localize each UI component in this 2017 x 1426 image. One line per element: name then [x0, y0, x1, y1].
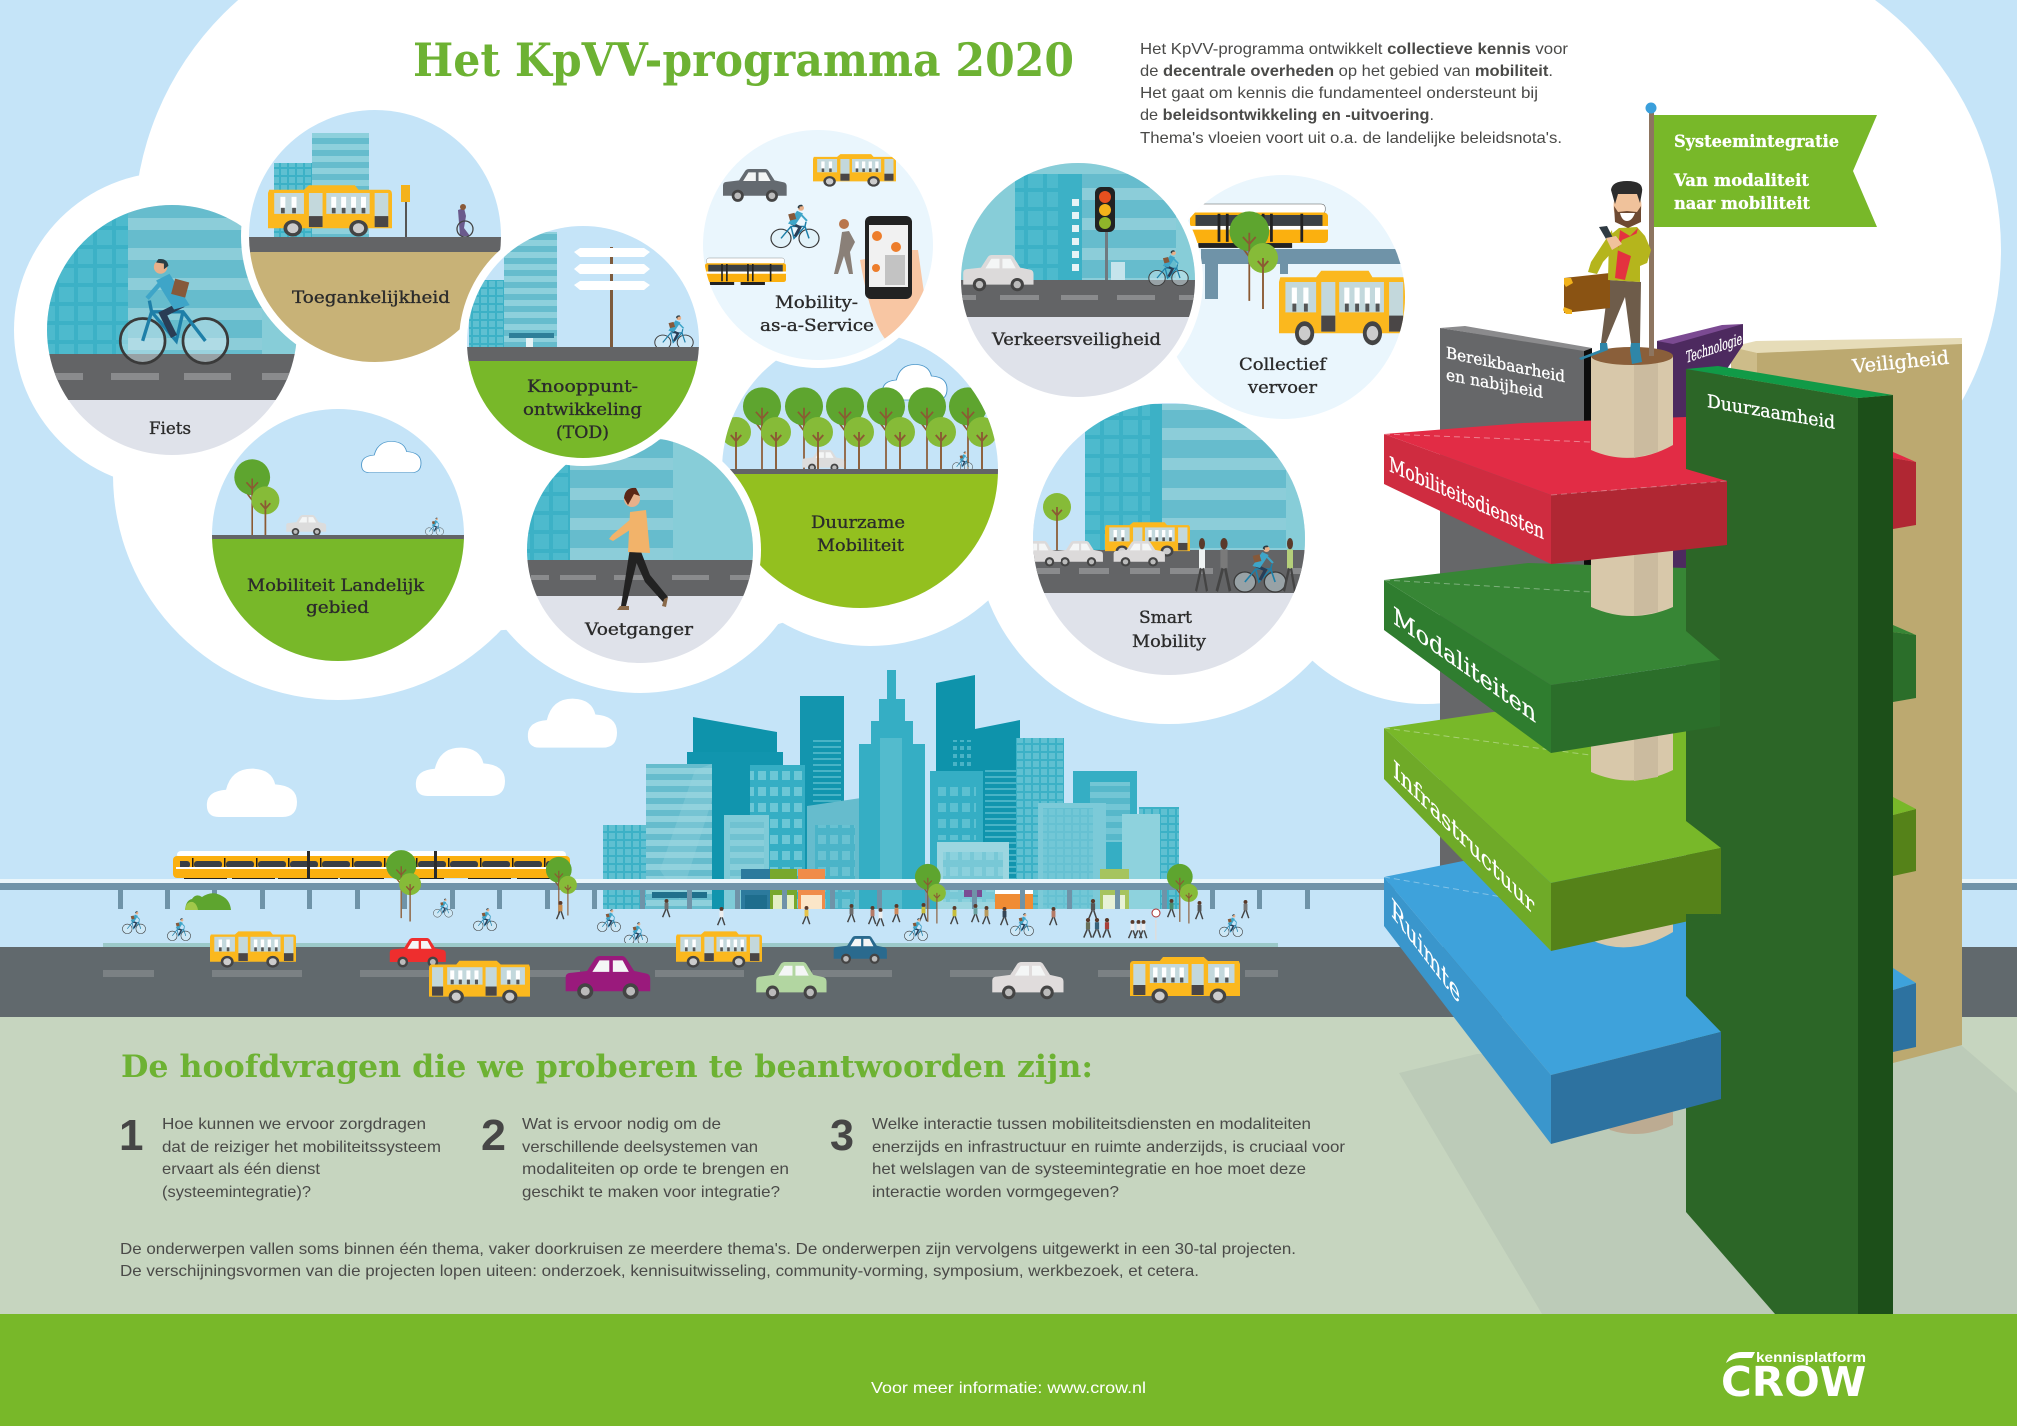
theme circle: Collectief vervoer: Collectief: [1239, 355, 1328, 375]
vehicles on road: [210, 931, 1240, 1004]
shelf: Ruimte: Ruimte: [1391, 892, 1460, 1012]
closing note: [120, 1241, 1296, 1280]
theme circle: Fiets: Fiets: [149, 419, 191, 439]
theme circle: Knooppuntontwikkeling (TOD): Knooppunt-: [527, 377, 638, 397]
panel: Technologie: Technologie: [1686, 329, 1742, 367]
cylinder segment: [1591, 545, 1673, 616]
theme circle: Mobility-as-a-Service: as-a-Service: [760, 316, 874, 336]
question 2: verschillende deelsystemen van: [522, 1139, 758, 1156]
theme circle: Collectief vervoer: [1176, 175, 1405, 419]
shelf: Infrastructuur: Infrastructuur: [1393, 754, 1534, 921]
flag with pole: Van modaliteit: [1673, 171, 1809, 191]
flag with pole: [1646, 102, 1877, 356]
question 1: Hoe kunnen we ervoor zorgdragen: [162, 1116, 426, 1133]
theme circle: Smart Mobility: Smart: [1139, 608, 1192, 628]
theme circle: Voetganger: [527, 438, 761, 663]
footer text: Voor meer informatie: www.crow.nl: [871, 1380, 1146, 1397]
heading: main questions: De hoofdvragen die we proberen te beantwoorden zijn:: [121, 1049, 1093, 1085]
theme circle: Fiets: [47, 205, 296, 455]
clouds above the city: [207, 699, 617, 817]
cylinder bottom segment: [1601, 1112, 1673, 1134]
theme circle: Mobility-as-a-Service: [695, 122, 941, 368]
roadside trees: [386, 850, 1198, 924]
theme circle: Collectief vervoer: vervoer: [1247, 378, 1318, 398]
shelf: Modaliteiten: Modaliteiten: [1393, 601, 1536, 729]
question 3: 3: [830, 1111, 854, 1160]
flag with pole: naar mobiliteit: [1674, 194, 1810, 214]
theme circle: Mobility-as-a-Service: Mobility-: [775, 293, 858, 313]
CROW logo: CROW: [1721, 1358, 1866, 1406]
intro text: Het gaat om kennis die fundamenteel ondersteunt bij: [1140, 85, 1538, 102]
theme circle: Mobiliteit Landelijk gebied: [212, 409, 464, 661]
question 3: [830, 1111, 1346, 1201]
panel: Bereikbaarheid en nabijheid: Bereikbaarheid: [1446, 343, 1565, 386]
ground: [0, 1017, 2017, 1314]
white cloud backdrop: [14, 0, 2001, 724]
panel: Duurzaamheid: [1686, 366, 1893, 1314]
question 2: geschikt te maken voor integratie?: [522, 1184, 780, 1201]
intro text: Thema's vloeien voort uit o.a. de landelijke beleidsnota's.: [1140, 130, 1562, 147]
theme circle: Mobiliteit Landelijk gebied: gebied: [306, 598, 369, 618]
pedestrians on pavement: [557, 899, 1249, 940]
theme circle: Verkeersveiligheid: [953, 155, 1203, 405]
question 3: het welslagen van de systeemintegratie en hoe moet deze: [872, 1161, 1306, 1178]
city skyline: [603, 670, 1179, 909]
cyclists on pavement: [122, 899, 1243, 945]
theme circle: Duurzame Mobiliteit: Mobiliteit: [817, 536, 904, 556]
intro text: Het KpVV-programma ontwikkelt collectieve kennis voor: [1140, 41, 1569, 58]
panel: Bereikbaarheid en nabijheid: en nabijheid: [1446, 365, 1543, 402]
theme circle: Verkeersveiligheid: Verkeersveiligheid: [991, 330, 1161, 350]
panel: Technologie: [1657, 324, 1743, 568]
cylinder segment: [1591, 915, 1673, 947]
theme circle: Knooppuntontwikkeling (TOD): ontwikkeling: [523, 400, 642, 420]
CROW logo: kennisplatform: [1756, 1349, 1866, 1365]
title: Het KpVV-programma 2020: [413, 33, 1074, 87]
question 1: dat de reiziger het mobiliteitssysteem: [162, 1139, 441, 1156]
theme circle: Smart Mobility: Mobility: [1132, 632, 1206, 652]
shelf: Infrastructuur: [1384, 700, 1721, 951]
question 3: enerzijds en infrastructuur en ruimte anderzijds, is cruciaal voor: [872, 1139, 1346, 1156]
intro text: [1140, 41, 1569, 147]
man with phone and suitcase: [1563, 181, 1651, 364]
question 1: (systeemintegratie)?: [162, 1184, 311, 1201]
intro text: de decentrale overheden op het gebied van mobiliteit.: [1140, 63, 1553, 80]
closing note: De onderwerpen vallen soms binnen één thema, vaker doorkruisen ze meerdere thema's. De onderwerpen zijn vervolgens uitgewerkt in een 30-tal projecten.: [120, 1241, 1296, 1258]
train on viaduct: [173, 851, 570, 881]
question 3: Welke interactie tussen mobiliteitsdiensten en modaliteiten: [872, 1116, 1311, 1133]
question 1: 1: [119, 1111, 143, 1160]
bush: [185, 893, 231, 910]
cylinder segment: [1591, 730, 1673, 781]
shelf: Mobiliteitsdiensten: Mobiliteitsdiensten: [1389, 453, 1544, 545]
elevated rail viaduct: [0, 879, 2017, 909]
panel: Veiligheid: Veiligheid: [1850, 347, 1950, 378]
question 2: Wat is ervoor nodig om de: [522, 1116, 721, 1133]
theme circle: Toegankelijkheid: Toegankelijkheid: [292, 288, 450, 308]
shelf stubs behind the green panel: [1893, 452, 1916, 1052]
closing note: De verschijningsvormen van die projecten lopen uiteen: onderzoek, kennisuitwisseling, community-vorming, symposium, werkbezoek, et cetera.: [120, 1263, 1199, 1280]
question 1: ervaart als één dienst: [162, 1161, 321, 1178]
panel: Duurzaamheid: Duurzaamheid: [1707, 391, 1835, 434]
intro text: de beleidsontwikkeling en -uitvoering .: [1140, 107, 1434, 124]
question 1: [119, 1111, 441, 1201]
panel: Bereikbaarheid en nabijheid: [1440, 326, 1592, 870]
theme circle: Toegankelijkheid: [241, 110, 501, 362]
theme circle: Mobiliteit Landelijk gebied: Mobiliteit Landelijk: [247, 576, 425, 596]
theme circle: Voetganger: Voetganger: [584, 620, 694, 640]
question 2: [481, 1111, 789, 1201]
theme circle: Knooppuntontwikkeling (TOD): (TOD): [556, 423, 609, 443]
footer band: [0, 1314, 2017, 1426]
question 2: modaliteiten op orde te brengen en: [522, 1161, 789, 1178]
road: [0, 943, 2017, 1017]
theme circle: Smart Mobility: [1033, 403, 1305, 675]
shelf: Mobiliteitsdiensten: [1384, 417, 1727, 564]
shelf: Ruimte: [1384, 861, 1721, 1144]
panel: Veiligheid: [1731, 338, 1962, 1063]
theme circle: Knooppuntontwikkeling (TOD): [459, 218, 710, 471]
question 2: 2: [481, 1111, 506, 1160]
shelf: Modaliteiten: [1384, 563, 1720, 753]
cylinder top segment: [1591, 347, 1673, 458]
pillar shadow on ground: [1399, 1045, 2017, 1314]
theme circle: Duurzame Mobiliteit: [722, 338, 998, 608]
flag with pole: Systeemintegratie: [1674, 132, 1839, 152]
theme circle: Duurzame Mobiliteit: Duurzame: [811, 513, 905, 533]
question 3: interactie worden vormgegeven?: [872, 1184, 1119, 1201]
shops: [652, 869, 1129, 909]
